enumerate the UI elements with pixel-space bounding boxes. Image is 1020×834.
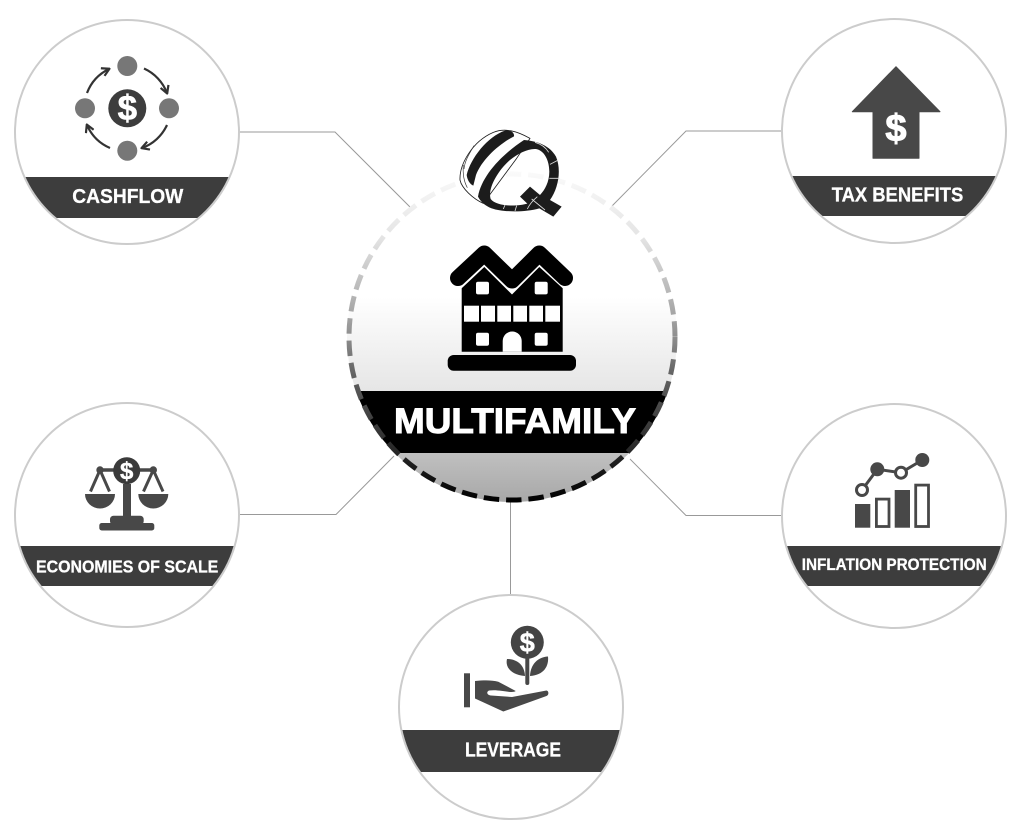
connector: inflation protection	[630, 459, 782, 516]
leverage banner	[395, 730, 635, 772]
center circle fill	[347, 172, 677, 502]
icon: growth chart	[855, 453, 929, 528]
panel: economies of scale	[10, 403, 250, 627]
cashflow banner	[26, 177, 228, 218]
cashflow label: CASHFLOW	[72, 185, 184, 208]
tax benefits banner	[792, 176, 996, 216]
icon: hand with money plant: $	[520, 628, 535, 658]
icon: apartment building	[448, 254, 576, 371]
logo: Q mark	[460, 130, 562, 217]
economies of scale banner	[20, 546, 234, 586]
panel: leverage	[395, 595, 635, 819]
leverage label: LEVERAGE	[465, 740, 561, 762]
connector: cashflow	[240, 132, 411, 208]
inflation protection label: INFLATION PROTECTION	[802, 556, 987, 574]
connector: tax benefits	[612, 131, 782, 206]
icon: balance scale: $	[120, 458, 134, 485]
icon: money cycle	[75, 56, 179, 161]
icon: up arrow with dollar	[852, 67, 940, 158]
panel: inflation protection	[775, 404, 1015, 628]
icon: balance scale	[85, 457, 168, 530]
inflation protection banner	[787, 546, 1001, 586]
economies of scale label: ECONOMIES OF SCALE	[36, 556, 218, 576]
tax benefits label: TAX BENEFITS	[832, 184, 963, 207]
center label: MULTIFAMILY	[394, 402, 636, 441]
connector: leverage	[510, 502, 512, 595]
panel: multifamily center	[340, 130, 685, 502]
connector: economies of scale	[240, 456, 394, 514]
dashed ring	[349, 174, 675, 500]
icon: money cycle: $	[118, 89, 137, 128]
panel: tax benefits	[775, 19, 1015, 243]
panel: cashflow	[10, 20, 250, 244]
center banner	[360, 391, 666, 453]
icon: hand with money plant	[464, 626, 548, 712]
icon: up arrow with dollar: $	[885, 108, 907, 150]
